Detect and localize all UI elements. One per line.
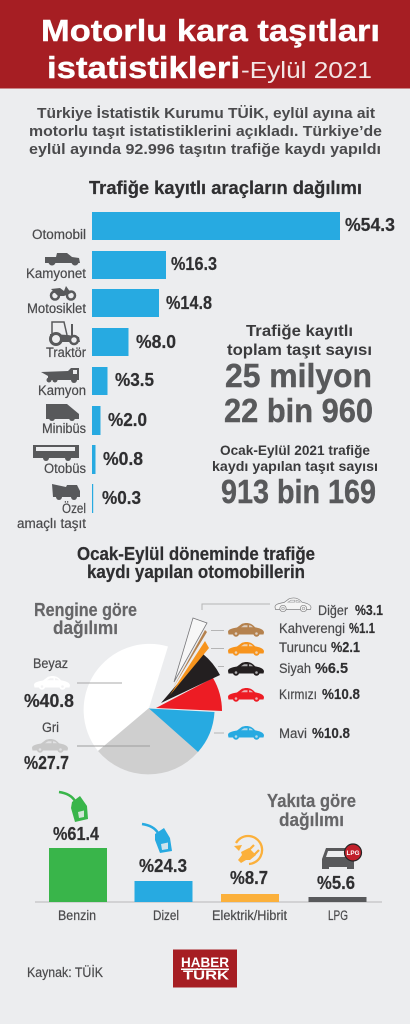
row: Motosiklet: Motosiklet xyxy=(27,301,86,316)
bar: Elektrik/Hibrit xyxy=(212,868,287,923)
row: Kamyonet: Kamyonet xyxy=(26,266,86,281)
row: Otobüs xyxy=(33,445,143,476)
row: Özel amaçlı taşıt: %0.3 xyxy=(102,488,141,508)
row: Otomobil: Otomobil xyxy=(32,227,86,242)
stat: Jan-Sep registrations: kaydı yapılan taşıt sayısı xyxy=(212,458,378,474)
heading: cars registered xyxy=(77,544,315,582)
label: Kırmızı xyxy=(228,686,360,703)
pie chart: car colours xyxy=(84,618,222,774)
logo: Haberturk: TÜRK xyxy=(183,968,229,982)
bar: LPG: LPG xyxy=(328,908,348,923)
slice: black xyxy=(161,654,220,703)
intro text: Türkiye İstatistik Kurumu TÜİK, eylül ayına ait xyxy=(37,105,375,122)
slice: grey xyxy=(98,708,198,774)
label: Gri: Gri xyxy=(42,720,59,735)
slice: brown xyxy=(173,630,207,688)
slice: blue xyxy=(149,708,214,752)
label: Gri: %27.7 xyxy=(24,753,69,773)
row: Özel amaçlı taşıt: amaçlı taşıt xyxy=(17,516,86,531)
row: Minibüs xyxy=(42,404,147,436)
row: Kamyonet: %16.3 xyxy=(171,254,217,274)
label: Beyaz xyxy=(24,656,122,711)
slice: white xyxy=(84,644,168,751)
slice: orange xyxy=(170,641,209,695)
header band with title: -Eylül 2021 xyxy=(241,57,372,83)
label: Gri xyxy=(24,720,150,773)
stat: total registered vehicles: Trafiğe kayıtlı xyxy=(246,323,353,340)
intro text xyxy=(29,105,382,158)
row: Otobüs: Otobüs xyxy=(44,461,86,476)
label: Mavi: %10.8 xyxy=(312,725,350,742)
stat: Jan-Sep registrations xyxy=(212,442,378,510)
slice: red xyxy=(156,678,222,711)
label: Siyah: Siyah xyxy=(279,661,311,676)
label: Mavi xyxy=(214,725,350,742)
row: Kamyonet xyxy=(26,251,217,281)
label: Turuncu: %2.1 xyxy=(331,639,360,656)
header band with title: istatistikleri xyxy=(47,50,240,85)
heading: by fuel: dağılımı xyxy=(279,810,344,830)
heading: by colour xyxy=(34,600,137,638)
stat: total registered vehicles xyxy=(224,323,373,429)
row: Kamyon xyxy=(38,367,154,398)
row: Kamyon: Kamyon xyxy=(38,383,86,398)
icon: LPG car: LPG xyxy=(346,850,360,857)
bar: LPG xyxy=(308,873,366,923)
icon: blue fuel nozzle xyxy=(142,824,172,853)
icon: green fuel nozzle xyxy=(59,792,88,822)
label: Kahverengi: Kahverengi xyxy=(279,621,345,636)
row: Minibüs: Minibüs xyxy=(42,421,86,436)
label: Siyah xyxy=(218,660,348,677)
label: Beyaz: Beyaz xyxy=(33,656,68,671)
bar: Dizel: Dizel xyxy=(153,908,179,923)
icon: LPG car xyxy=(322,844,362,869)
row: Motosiklet: %14.8 xyxy=(166,293,212,313)
row: Traktör: %8.0 xyxy=(136,332,176,352)
logo: Haberturk: HABER xyxy=(181,954,229,970)
bar: Elektrik/Hibrit: Elektrik/Hibrit xyxy=(212,908,287,923)
label: Kahverengi xyxy=(211,620,375,637)
row: Kamyon: %3.5 xyxy=(115,370,154,390)
heading: by colour: Rengine göre xyxy=(34,600,137,620)
icon: electric plug xyxy=(234,836,262,864)
label: Turuncu xyxy=(211,639,360,656)
intro text: eylül ayında 92.996 taşıtın trafiğe kaydı yapıldı xyxy=(29,142,381,158)
bar chart: registered vehicles xyxy=(17,212,395,531)
row: Özel amaçlı taşıt: Özel xyxy=(62,501,86,516)
heading: cars registered: kaydı yapılan otomobillerin xyxy=(87,562,305,582)
label: Kırmızı: %10.8 xyxy=(322,686,360,703)
row: Otobüs: %0.8 xyxy=(103,449,143,469)
bar: Benzin: Benzin xyxy=(58,908,96,923)
label: Kırmızı: Kırmızı xyxy=(279,687,317,702)
bar: Elektrik/Hibrit: %8.7 xyxy=(230,868,268,888)
label: Turuncu: Turuncu xyxy=(279,640,327,655)
label: Siyah: %6.5 xyxy=(315,660,348,677)
label: Kahverengi: %1.1 xyxy=(349,620,375,637)
row: Motosiklet xyxy=(27,286,212,317)
stat: Jan-Sep registrations: 913 bin 169 xyxy=(221,473,376,510)
row: Özel amaçlı taşıt xyxy=(17,484,141,531)
header band with title xyxy=(0,0,410,88)
heading: by fuel xyxy=(267,791,356,830)
bar: Benzin: %61.4 xyxy=(53,824,99,844)
slice: other xyxy=(174,618,207,682)
label: Beyaz: %40.8 xyxy=(24,691,74,711)
row: Traktör: Traktör xyxy=(46,345,86,360)
bar: Dizel: %24.3 xyxy=(139,856,187,876)
stat: total registered vehicles: 22 bin 960 xyxy=(224,392,373,429)
heading: by colour: dağılımı xyxy=(53,618,118,638)
heading: vehicle distribution: Trafiğe kayıtlı araçların dağılımı xyxy=(89,178,362,198)
stat: total registered vehicles: 25 milyon xyxy=(225,357,372,394)
heading: cars registered: Ocak-Eylül döneminde trafiğe xyxy=(77,544,315,564)
label: Mavi: Mavi xyxy=(279,726,307,741)
fuel bar chart xyxy=(35,824,382,923)
row: Minibüs: %2.0 xyxy=(108,410,147,430)
label: Diğer xyxy=(202,598,383,619)
heading: by fuel: Yakıta göre xyxy=(267,791,356,811)
header band with title: Motorlu kara taşıtları xyxy=(41,13,380,48)
bar: Dizel xyxy=(134,856,192,923)
stat: total registered vehicles: toplam taşıt sayısı xyxy=(227,342,372,359)
source: Kaynak: TÜİK xyxy=(27,965,103,980)
label: Diğer: Diğer xyxy=(318,603,348,618)
label: Diğer: %3.1 xyxy=(355,602,383,619)
bar: LPG: %5.6 xyxy=(317,873,355,893)
row: Otomobil: %54.3 xyxy=(345,215,395,235)
logo: Haberturk xyxy=(173,950,237,988)
row: Traktör xyxy=(46,322,176,360)
intro text: motorlu taşıt istatistiklerini açıkladı. Türkiye’de xyxy=(29,124,382,140)
row: Otomobil xyxy=(32,212,395,242)
bar: Benzin xyxy=(49,824,107,923)
stat: Jan-Sep registrations: Ocak-Eylül 2021 trafiğe xyxy=(220,442,370,458)
